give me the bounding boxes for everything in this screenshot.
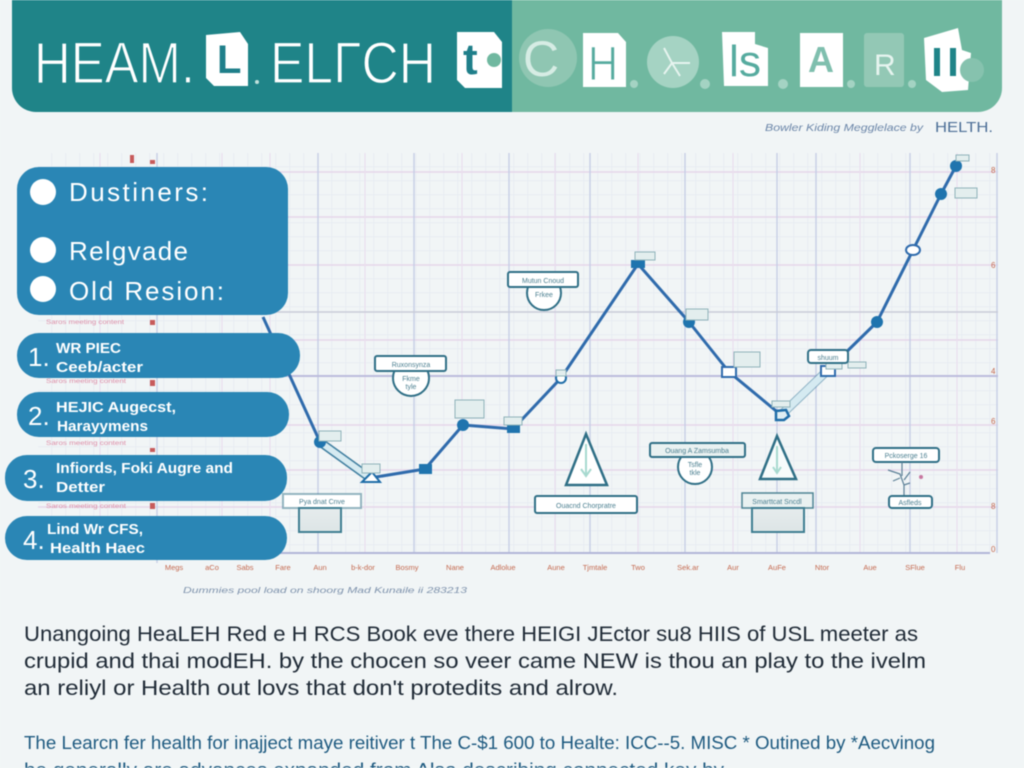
x axis labels: Sabs [236,563,254,572]
list item 3: 3. [23,464,45,494]
x axis labels: Aur [727,563,739,572]
right axis ticks: 6 [991,261,996,270]
left axis ticks: Saros meeting content [46,440,126,447]
x axis labels: AuFe [768,563,786,572]
body paragraph: crupid and thai modEH. by the chocen so veer came NEW is thou an play to the ivelm [24,649,926,673]
list item 1: 1. [28,342,50,372]
body paragraph: an reliyl or Health out lovs that don't protedits and alrow. [24,676,618,700]
x axis labels: Aun [313,563,327,572]
callout: circle three: Ouang A Zamsumba [665,448,729,455]
legend item: Relgvade: Relgvade [69,236,188,266]
x axis labels: Sek.ar [677,563,699,572]
callout: triangle two [742,436,813,532]
callout: scribble: Pckoserge 16 [885,453,928,460]
left axis ticks: Saros meeting content [46,378,126,385]
callout: left bottom box: Pya dnat Cnve [299,499,345,506]
icon: letter tile L [206,32,248,86]
icon: letter tile A [800,33,843,87]
icon: circle C: C [523,31,559,87]
left axis ticks: Saros meeting content [46,503,126,510]
x axis labels [165,563,965,572]
header banner [12,0,1002,112]
x axis labels: aCo [205,563,219,572]
callout: circle one: Fkme [402,376,420,383]
body paragraph: Unangoing HeaLEH Red e H RCS Book eve there HEIGI JEctor su8 HIIS of USL meeter as [24,622,918,646]
list item 1 [17,333,300,378]
line chart [38,153,998,595]
callout: left bottom box [283,494,361,532]
chart caption: Dummies pool load on shoorg Mad Kunaile ii 283213 [183,585,467,595]
icon: letter tile t: t [463,35,478,84]
header title: first word: HEAM. [34,31,195,96]
list item 3: Detter [56,480,105,496]
icon: circle X [647,36,699,88]
left axis ticks [46,155,155,510]
right axis ticks: 0 [991,545,996,554]
list item 4: Lind Wr CFS, [47,522,143,538]
left axis ticks: Saros meeting content [46,319,124,326]
icon: letter tile t [457,32,502,88]
list item 4 [5,516,287,560]
icon: circle C [519,29,577,87]
right axis ticks: 4 [991,367,996,376]
callout: triangle two: Smarttcat Sncdl [752,499,802,506]
callout: circle two [508,272,578,310]
data markers [314,160,962,482]
x axis labels: Fare [275,563,291,572]
list item 2 [17,392,289,437]
caption: powered by: Bowler Kiding Megglelace by [765,123,924,134]
callout: circle two: Mutun Cnoud [522,278,564,285]
callout: circle three [650,443,745,484]
callout: scribble: Asfleds [899,500,922,507]
right axis ticks: 8 [991,166,996,175]
x axis labels: Nane [446,563,464,572]
x axis labels: Bosmy [396,563,419,572]
list item 1: Ceeb/acter [56,360,143,376]
icon: letter tile S [722,32,768,86]
right axis ticks: 6 [991,417,996,426]
x axis labels: Adlolue [490,563,516,572]
icon: letter tile R: R [874,49,896,82]
highlight bars [320,370,828,478]
list item 1: WR PIEC [56,341,122,357]
callout: circle one [375,356,446,396]
icon: letter tile H: H [588,38,618,91]
list item 2: HEJIC Augecst, [56,400,176,416]
x axis labels: b-k-dor [351,563,375,572]
callout: triangle one: Ouacnd Chorpratre [556,503,616,510]
icon: letter tile R [864,33,904,87]
x axis labels: Aue [863,563,877,572]
legend item: Old Resion: Old Resion: [69,276,224,306]
icon: letter tile II [924,28,984,92]
callout: top right box [808,350,848,363]
list item 2: 2. [28,401,50,431]
body paragraph [24,622,926,700]
data line [263,166,956,478]
icon: letter tile S: ls [729,37,761,86]
list item 3: Infiords, Foki Augre and [56,461,233,477]
callout: circle three: tkle [690,470,701,477]
list item 3 [5,455,287,501]
x axis labels: Megs [165,563,183,572]
callout: circle one: tyle [406,384,417,391]
icon: letter tile L: L [217,38,241,82]
list item 2: Harayymens [57,419,148,435]
footer note [24,733,935,768]
icon: letter tile A: A [808,39,834,80]
caption: powered by: HELTH. [935,119,993,136]
legend item: Dustiners: Dustiners: [69,177,208,207]
small point labels [319,155,977,473]
x axis labels: SFlue [905,563,925,572]
callout: scribble [873,448,939,508]
callout: triangle one [535,434,637,513]
caption: powered by [765,119,993,136]
chart grid [38,153,998,563]
header title: second word: ELΓCH [270,31,436,96]
panel: legend [17,167,288,315]
list item 4: Health Haec [50,541,145,557]
x axis labels: Flu [955,563,965,572]
callout: circle one: Ruxonsynza [392,362,430,369]
callout: top right box: shuum [817,355,839,362]
right axis ticks [991,166,996,554]
list item 4: 4. [23,525,45,555]
x axis labels: Tjmtale [583,563,607,572]
decorative dots [255,79,916,89]
x axis labels: Two [631,563,645,572]
right axis ticks: 8 [991,502,996,511]
footer note: The Learcn fer health for inajject maye reitiver t The C-$1 600 to Healte: ICC--5. MISC * Outined by *Aecvinog [24,733,935,753]
x axis labels: Ntor [815,563,830,572]
x axis labels: Aune [547,563,565,572]
callout: circle two: Frkee [535,292,553,299]
callout: circle three: Tsfle [688,462,702,469]
